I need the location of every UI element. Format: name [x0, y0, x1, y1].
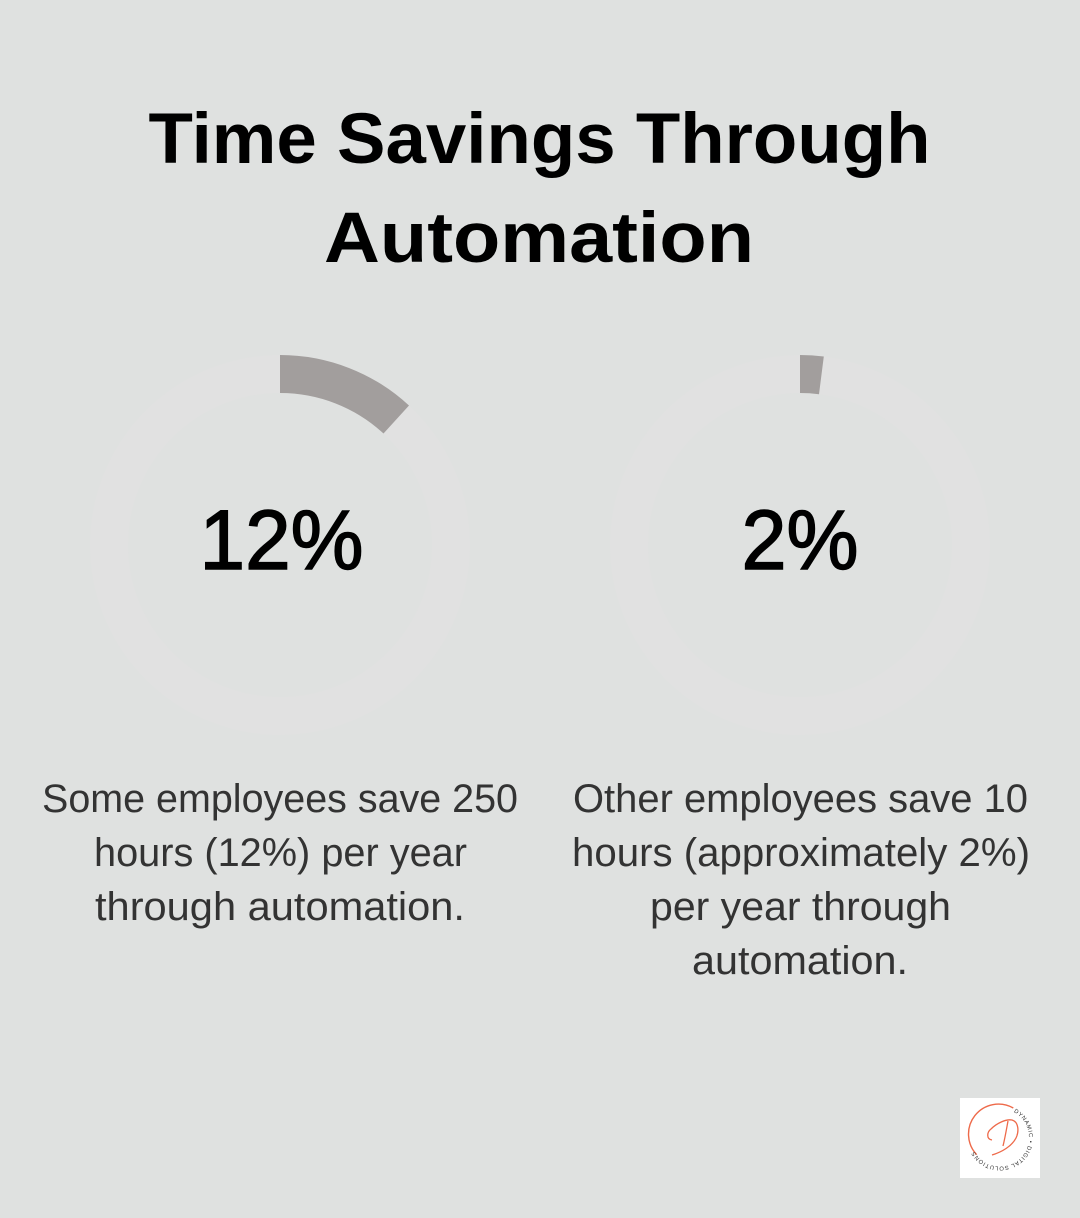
- donut chart: 2%: [629, 355, 971, 716]
- description: some employees: Some employees save 250: [42, 777, 518, 821]
- panel: 12 percent: [42, 355, 518, 929]
- description: some employees: hours (12%) per year: [94, 831, 467, 875]
- description: other employees: per year through: [650, 885, 951, 929]
- description: some employees: [42, 777, 518, 929]
- logo: DYNAMIC • DIGITAL SOLUTIONS: [972, 1108, 1033, 1171]
- description: some employees: through automation.: [95, 885, 465, 929]
- description: other employees: hours (approximately 2%): [572, 831, 1030, 875]
- description: other employees: automation.: [692, 939, 908, 983]
- value: 2%: 2%: [742, 493, 858, 587]
- description: other employees: [572, 777, 1030, 983]
- description: other employees: Other employees save 10: [573, 777, 1028, 821]
- value: 12%: 12%: [200, 493, 364, 587]
- title: Automation: [324, 199, 754, 278]
- title: [148, 100, 930, 278]
- panel: 2 percent: [572, 355, 1030, 983]
- title: Time Savings Through: [148, 100, 930, 179]
- donut chart: 12%: [109, 355, 451, 716]
- logo: [960, 1098, 1040, 1178]
